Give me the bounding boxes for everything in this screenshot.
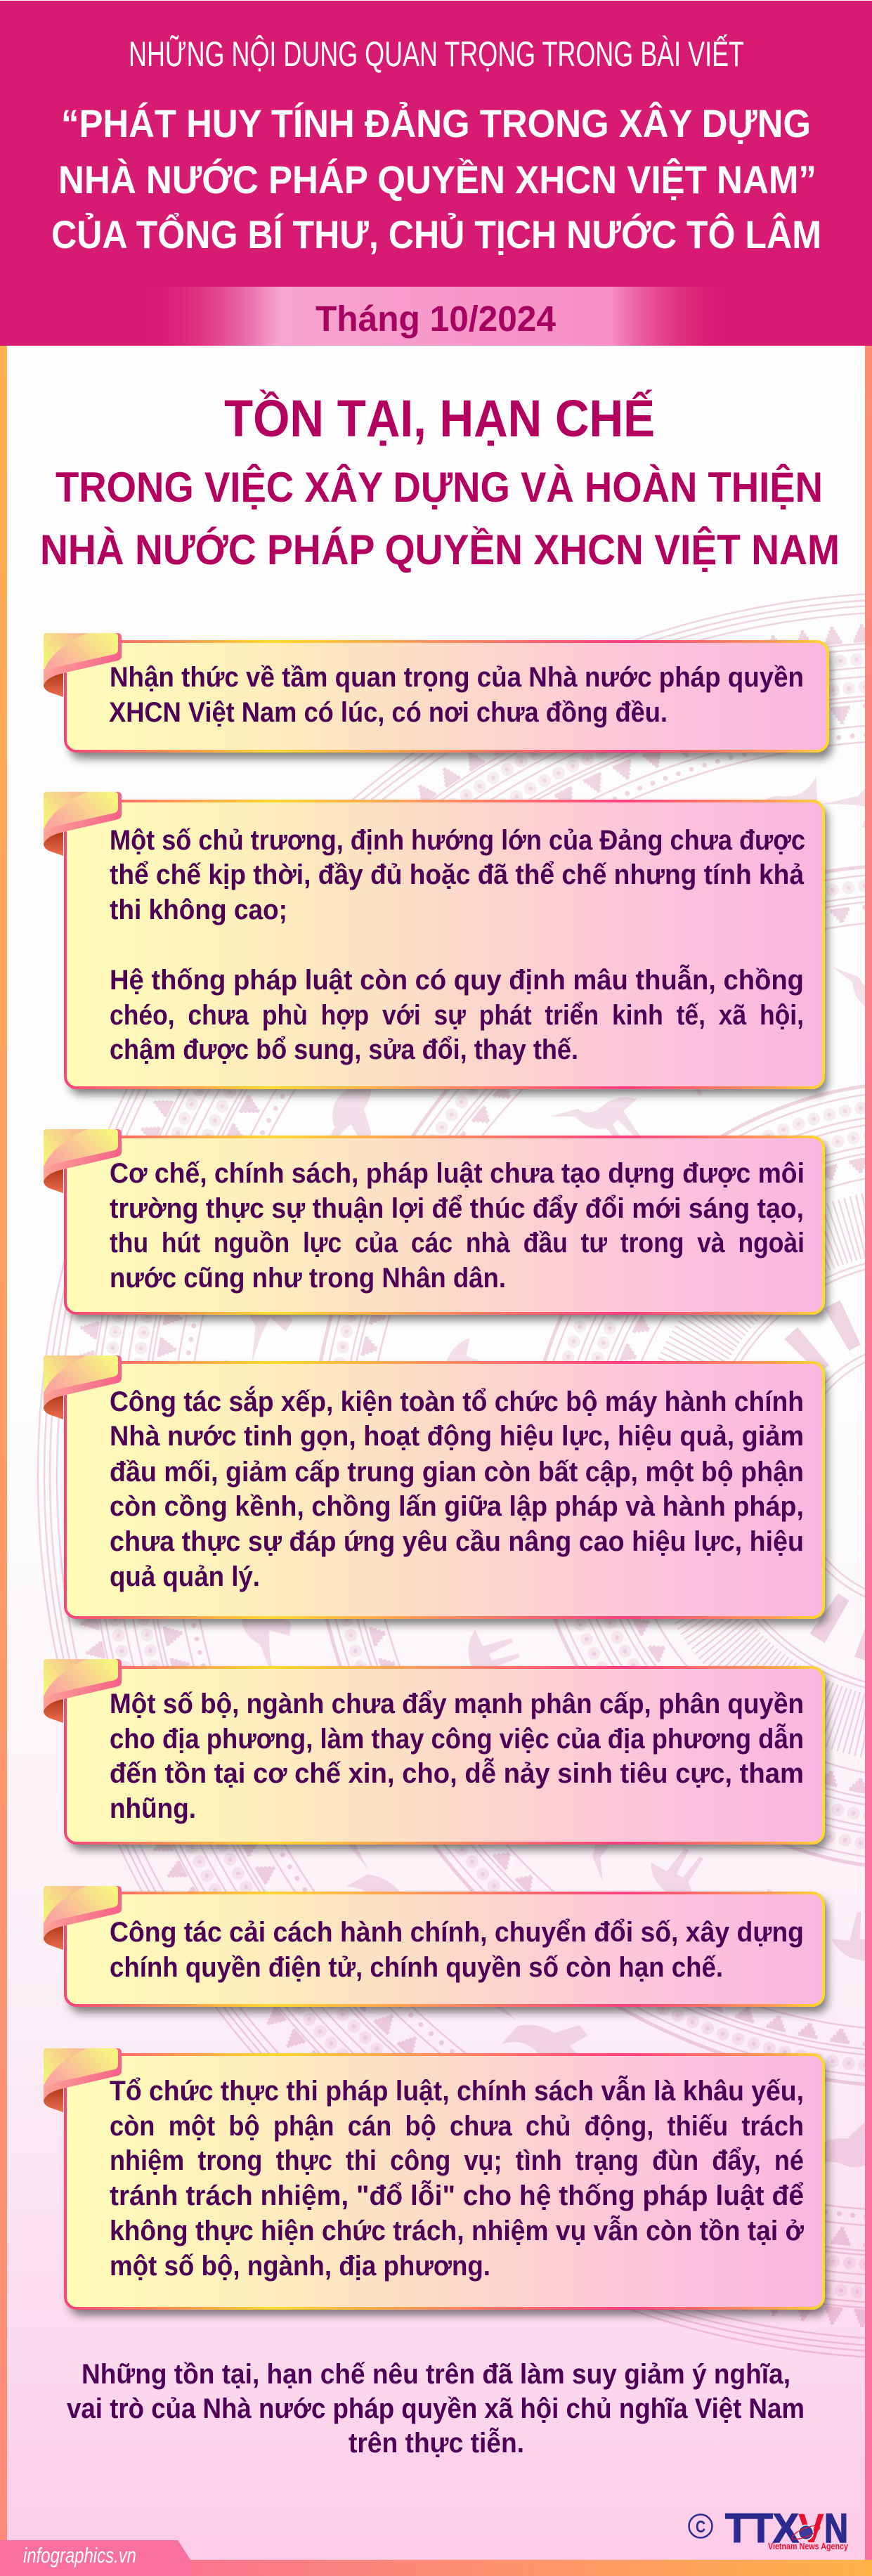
icon: folded corner ribbon xyxy=(44,1886,122,1950)
card 3 xyxy=(44,1129,828,1320)
card 2 text: Một số chủ trương, định hướng lớn của Đảng chưa được xyxy=(110,825,805,856)
card 4 text xyxy=(110,1386,804,1592)
footer tab with site name xyxy=(0,2540,190,2576)
card 7 body xyxy=(65,2055,824,2308)
icon: copyright symbol: C xyxy=(696,2518,705,2537)
card 6 text: Công tác cải cách hành chính, chuyển đổi số, xây dựng xyxy=(110,1917,804,1948)
card 3 body xyxy=(65,1137,824,1313)
card 5 body xyxy=(65,1667,824,1843)
card 2 text: chéo, chưa phù hợp với sự phát triển kinh tế, xã hội, xyxy=(110,1000,804,1031)
date band xyxy=(139,287,734,346)
card 2 xyxy=(44,792,828,1095)
icon: copyright symbol xyxy=(689,2514,712,2538)
card 3 text: nước cũng như trong Nhân dân. xyxy=(110,1263,506,1294)
article title: “PHÁT HUY TÍNH ĐẢNG TRONG XÂY DỰNG xyxy=(61,101,811,145)
card 4 text: quả quản lý. xyxy=(110,1561,260,1592)
icon: folded corner ribbon xyxy=(44,792,122,856)
icon: folded corner ribbon xyxy=(44,633,122,697)
card 1 xyxy=(44,633,832,759)
card 3 text xyxy=(110,1158,805,1294)
card 2 text: chậm được bổ sung, sửa đổi, thay thế. xyxy=(110,1034,578,1065)
card 2 text xyxy=(110,825,805,1065)
left side stripe xyxy=(0,346,7,2545)
card 5 text: đến tồn tại cơ chế xin, cho, dễ nảy sinh tiêu cực, tham xyxy=(110,1758,804,1789)
closing statement: trên thực tiễn. xyxy=(349,2428,524,2459)
closing statement: vai trò của Nhà nước pháp quyền xã hội chủ nghĩa Việt Nam xyxy=(67,2393,805,2424)
icon: folded corner ribbon xyxy=(44,1659,122,1723)
card 1 text: Nhận thức về tầm quan trọng của Nhà nước pháp quyền xyxy=(110,662,804,693)
card 4 text: đầu mối, giảm cấp trung gian còn bất cập, một bộ phận xyxy=(110,1457,804,1488)
card 3 text: Cơ chế, chính sách, pháp luật chưa tạo dựng được môi xyxy=(110,1158,805,1189)
card 4 text: còn cồng kềnh, chồng lấn giữa lập pháp và hành pháp, xyxy=(110,1491,804,1522)
icon: folded corner ribbon xyxy=(44,2048,122,2112)
card 7 text: tránh trách nhiệm, "đổ lỗi" cho hệ thống pháp luật để xyxy=(110,2180,804,2211)
TTXVN logo: N xyxy=(824,2506,848,2551)
card 4 xyxy=(44,1355,828,1625)
card 1 body xyxy=(65,642,828,751)
closing statement: Những tồn tại, hạn chế nêu trên đã làm suy giảm ý nghĩa, xyxy=(82,2359,790,2390)
card 7 text: một số bộ, ngành, địa phương. xyxy=(110,2251,490,2282)
card 3 text: thu hút nguồn lực của các nhà đầu tư trong và ngoài xyxy=(110,1228,805,1258)
card 2 body xyxy=(65,801,824,1088)
card 5 text: cho địa phương, làm thay công việc của địa phương dẫn xyxy=(110,1724,804,1755)
card 1 text xyxy=(109,662,804,728)
article title: NHÀ NƯỚC PHÁP QUYỀN XHCN VIỆT NAM” xyxy=(58,157,816,202)
header panel xyxy=(0,1,872,346)
card 6 text xyxy=(110,1917,804,1983)
card 2 text: thi không cao; xyxy=(110,895,287,925)
card 7 xyxy=(44,2048,828,2315)
right side stripe xyxy=(865,346,872,2563)
card 4 text: chưa thực sự đáp ứng yêu cầu nâng cao hiệu lực, hiệu xyxy=(110,1526,804,1557)
date label: Tháng 10/2024 xyxy=(315,299,557,339)
card 5 text: Một số bộ, ngành chưa đẩy mạnh phân cấp, phân quyền xyxy=(110,1689,804,1719)
card 2 text: Hệ thống pháp luật còn có quy định mâu thuẫn, chồng xyxy=(110,965,804,996)
card 3 text: trường thực sự thuận lợi để thúc đẩy đổi mới sáng tạo, xyxy=(110,1193,804,1224)
site name: infographics.vn xyxy=(23,2543,136,2568)
card 7 text: nhiệm trong thực thi công vụ; tình trạng đùn đẩy, né xyxy=(110,2145,804,2176)
card 7 text xyxy=(110,2076,805,2282)
card 4 text: Nhà nước tinh gọn, hoạt động hiệu lực, hiệu quả, giảm xyxy=(110,1421,804,1452)
card 2 text: thể chế kịp thời, đầy đủ hoặc đã thể chế nhưng tính khả xyxy=(110,859,805,890)
agency name: Vietnam News Agency xyxy=(768,2541,849,2551)
icon: folded corner ribbon xyxy=(44,1129,122,1193)
card 6 text: chính quyền điện tử, chính quyền số còn hạn chế. xyxy=(110,1952,723,1983)
closing statement xyxy=(67,2359,805,2459)
icon: globe with orbit xyxy=(790,2523,821,2542)
card 6 body xyxy=(65,1893,824,2005)
background watermark: bronze drum pattern xyxy=(38,592,872,2359)
TTXVN logo xyxy=(725,2506,849,2551)
section heading: TỒN TẠI, HẠN CHẾ xyxy=(224,389,655,448)
card 4 body xyxy=(65,1362,824,1618)
card 7 text: Tổ chức thực thi pháp luật, chính sách vẫn là khâu yếu, xyxy=(110,2076,804,2107)
card 7 text: không thực hiện chức trách, nhiệm vụ vẫn còn tồn tại ở xyxy=(110,2216,805,2246)
card 6 xyxy=(44,1886,828,2012)
TTXVN logo: TTX xyxy=(725,2506,799,2551)
footer bar xyxy=(0,2560,872,2576)
TTXVN logo: V xyxy=(798,2506,824,2551)
icon: folded corner ribbon xyxy=(44,1355,122,1419)
card 5 text xyxy=(110,1689,804,1824)
card 5 xyxy=(44,1659,828,1850)
card 1 text: XHCN Việt Nam có lúc, có nơi chưa đồng đều. xyxy=(109,697,668,728)
card 5 text: nhũng. xyxy=(110,1793,196,1824)
article title xyxy=(51,101,821,256)
card 7 text: còn một bộ phận cán bộ chưa chủ động, thiếu trách xyxy=(110,2111,804,2142)
section heading xyxy=(40,389,840,573)
card 4 text: Công tác sắp xếp, kiện toàn tổ chức bộ máy hành chính xyxy=(110,1386,804,1417)
